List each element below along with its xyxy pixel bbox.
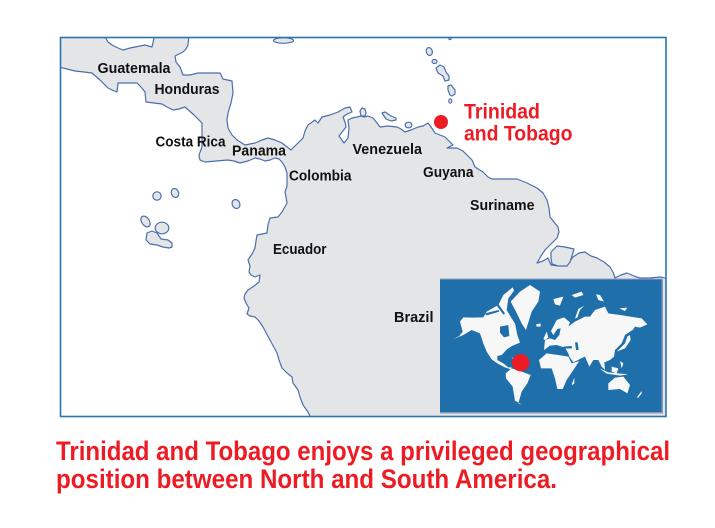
land: Central and South America [55,35,670,420]
Marajo island [551,246,574,266]
Pacific islands [139,187,241,248]
country labels: Guatemala [98,61,171,77]
country labels: Ecuador [273,242,327,258]
country labels: Honduras [154,82,220,98]
headline: Trinidad and Tobago enjoys a privileged geographical [56,436,670,466]
label: Trinidad and Tobago: and Tobago [464,122,572,146]
infographic [56,36,668,494]
country labels: Suriname [470,198,534,214]
marker: Trinidad and Tobago [434,115,448,129]
marker: world location [512,354,529,371]
country labels [98,61,534,326]
country labels: Panama [232,144,287,160]
country labels: Costa Rica [156,135,226,151]
country labels: Venezuela [352,142,423,158]
headline [56,436,670,494]
panel: regional map [55,35,670,420]
country labels: Brazil [394,310,434,326]
Caribbean islands [274,37,455,128]
label: Trinidad and Tobago [464,100,572,146]
country labels: Colombia [289,169,352,185]
frame [60,38,666,416]
Africa, Eurasia and Oceania [539,292,647,398]
inset: world map [440,278,663,414]
Americas and Greenland [453,285,541,404]
label: Trinidad and Tobago: Trinidad [464,100,540,124]
country labels: Guyana [423,165,474,181]
headline: position between North and South America. [56,464,557,494]
